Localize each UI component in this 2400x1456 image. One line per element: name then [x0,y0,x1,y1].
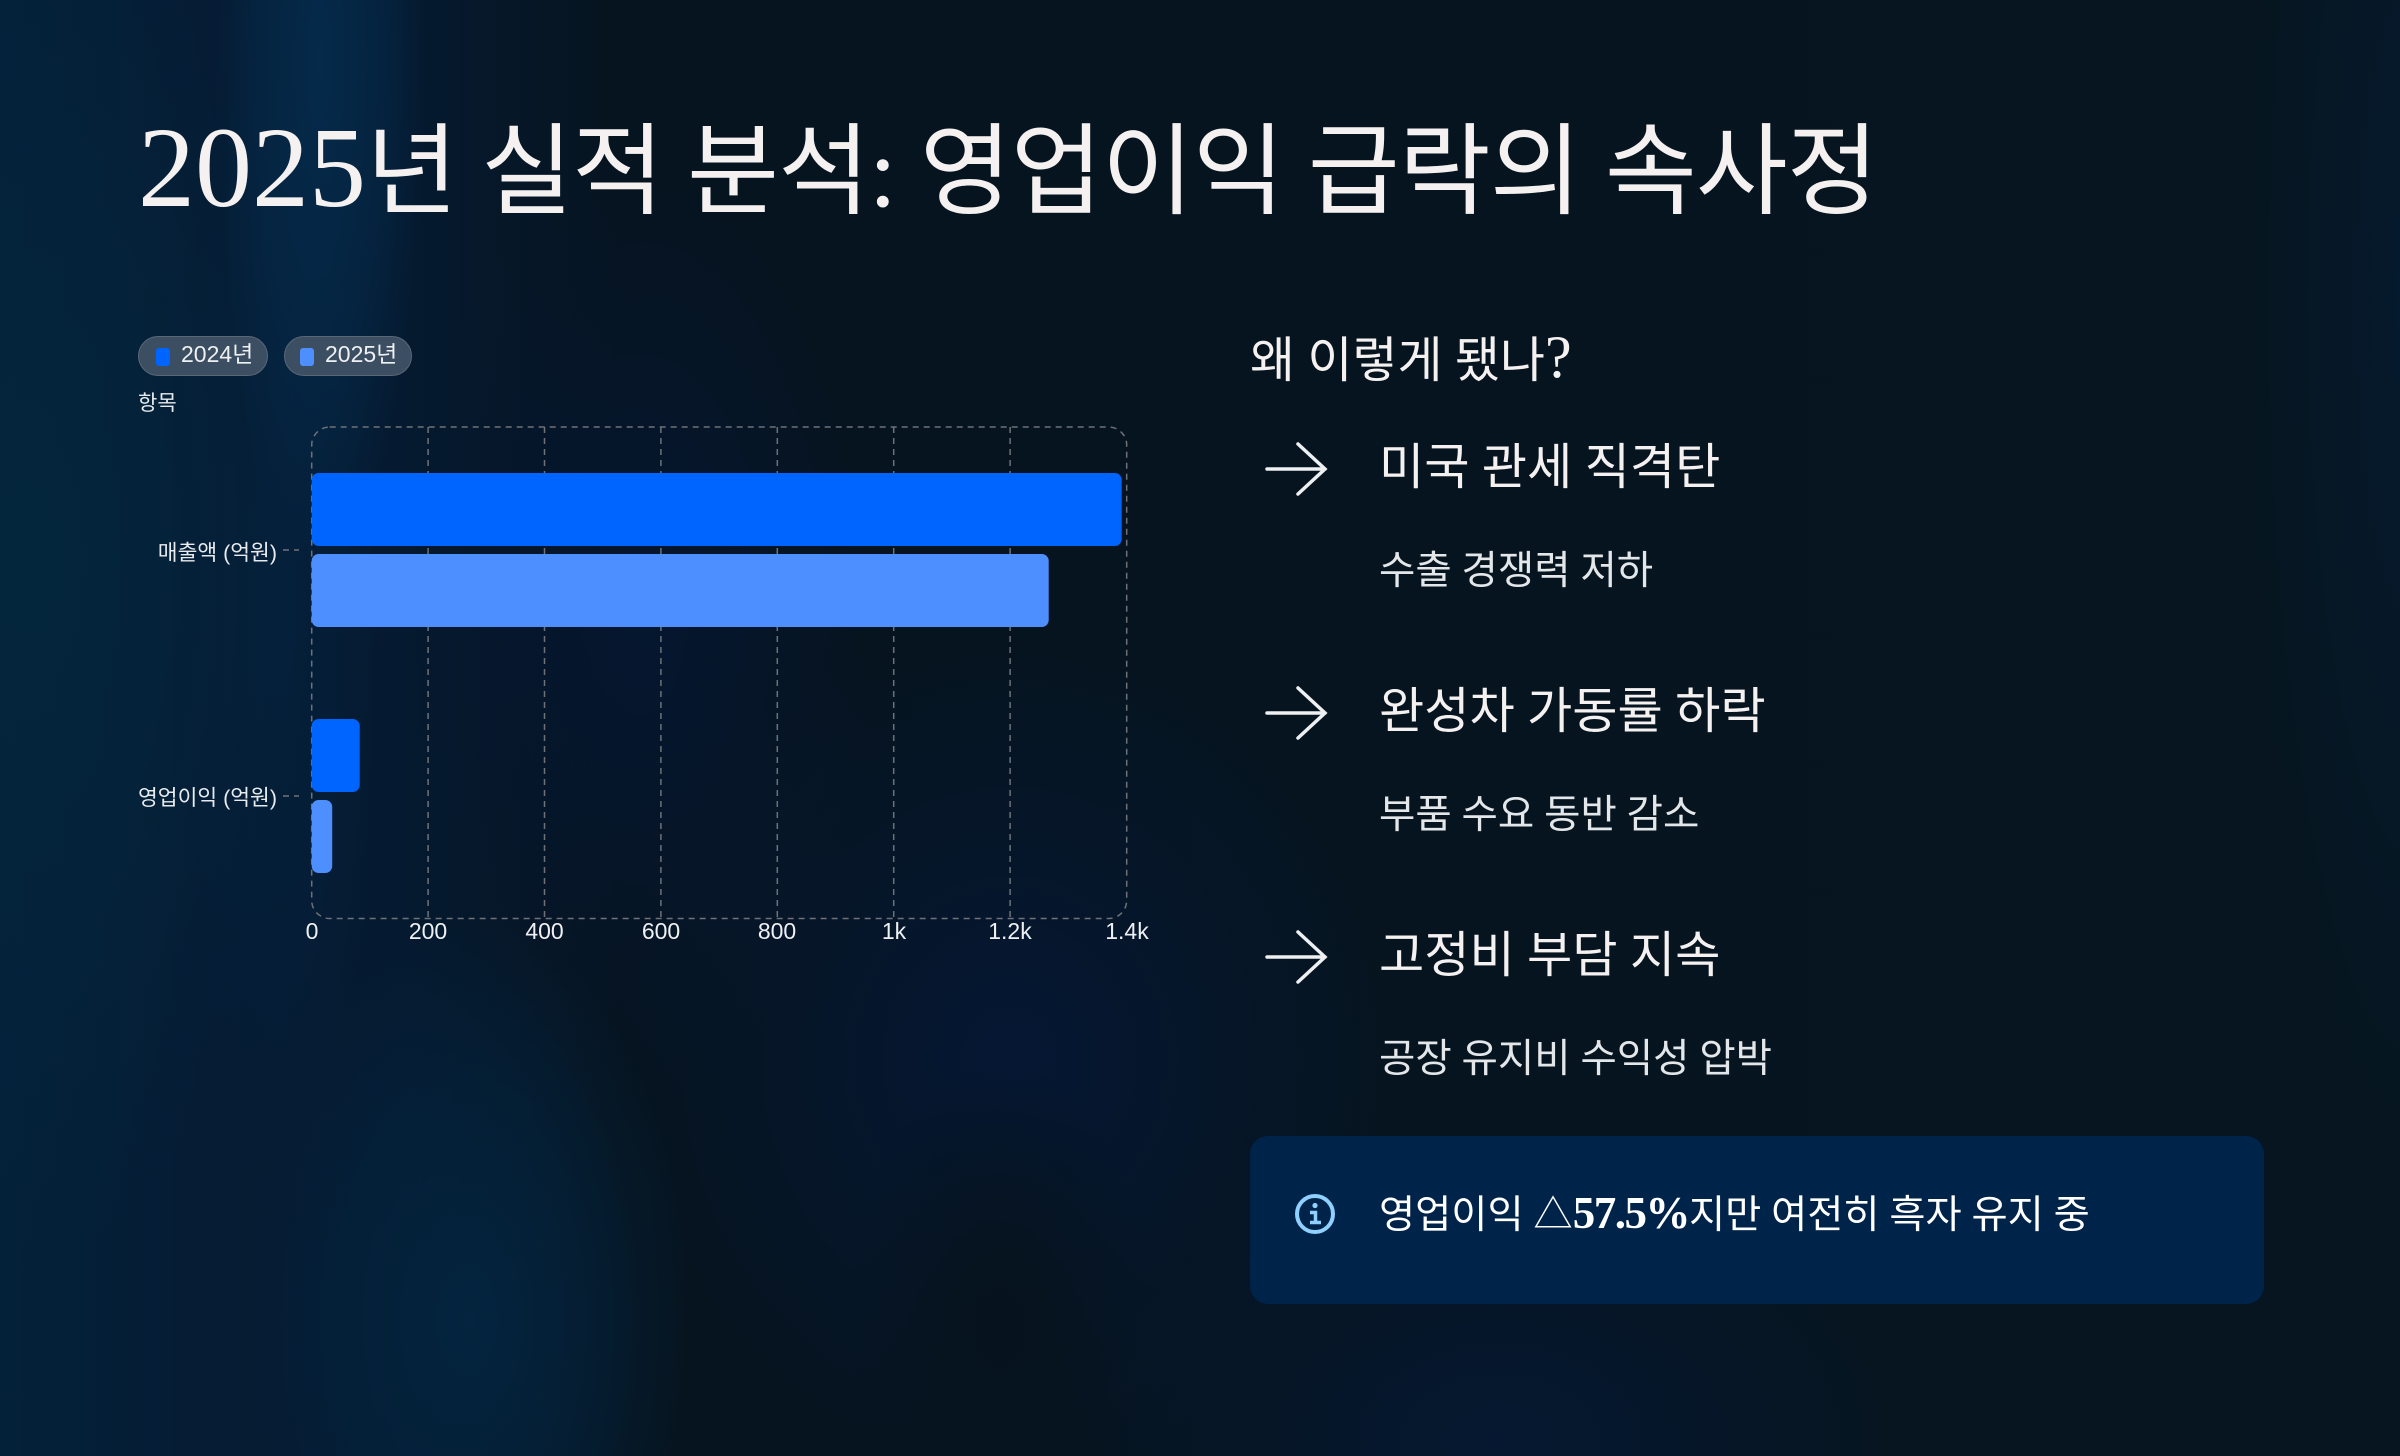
grid [283,427,1127,918]
reason detail: 부품 수요 동반 감소 [1379,793,1699,837]
axis ticks: 0 [306,918,318,944]
callout text: 영업이익 △57.5%지만 여전히 흑자 유지 중 [1379,1188,2090,1238]
legend item: 2025: 2025년 [325,341,397,367]
bars: operating profit [312,719,360,873]
axis ticks: 1.2k [988,918,1032,944]
icon: arrow [1265,442,1328,496]
right heading: 왜 이렇게 됐나? [1250,324,1572,390]
chart legend [138,336,412,376]
icon: arrow [1265,686,1328,740]
reason 1 [1265,440,1720,593]
axis ticks [306,918,1149,944]
legend item: 2025 [284,336,412,376]
axis ticks: 200 [409,918,447,944]
reason title: 고정비 부담 지속 [1379,928,1720,983]
bars: revenue [312,473,1122,627]
callout [1250,1136,2264,1304]
icon: info [1295,1194,1335,1234]
axis ticks: 800 [758,918,796,944]
reason title: 완성차 가동률 하락 [1379,684,1766,739]
axis title: 항목 [138,392,177,415]
title: 2025년 실적 분석: 영업이익 급락의 속사정 [138,104,1878,231]
legend item: 2024: 2024년 [181,341,253,367]
icon: arrow [1265,930,1328,984]
reason detail: 공장 유지비 수익성 압박 [1379,1037,1772,1081]
axis ticks: 1k [882,918,907,944]
reason detail: 수출 경쟁력 저하 [1379,549,1653,593]
axis ticks: 600 [642,918,680,944]
category labels: 매출액 (억원) [158,541,277,565]
bar chart [138,426,1149,944]
axis ticks: 1.4k [1105,918,1149,944]
reason 2 [1265,684,1766,837]
category labels [138,541,277,810]
reason title: 미국 관세 직격탄 [1379,440,1720,495]
axis ticks: 400 [525,918,564,944]
category labels: 영업이익 (억원) [138,786,277,810]
legend item: 2024 [138,336,268,376]
reason 3 [1265,928,1772,1081]
